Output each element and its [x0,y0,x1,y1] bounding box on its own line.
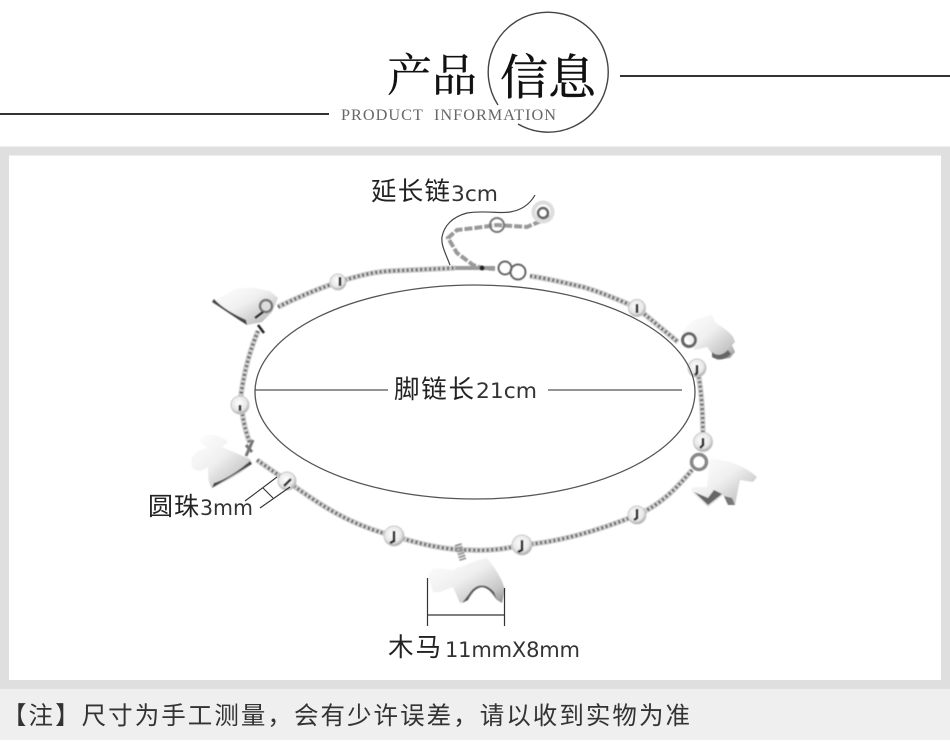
bracelet chain [241,202,703,550]
label: bead size: 3mm [200,496,253,520]
charm: right lower [692,454,757,507]
label: anklet length: 脚链长 [394,376,474,404]
label: charm size: 11mmX8mm [445,638,580,662]
subtitle: PRODUCT INFORMATION [341,107,557,124]
extension chain [448,217,550,269]
panel: product photo frame [4,151,946,684]
caption background [0,689,950,740]
heading: circled title: 信息 [500,39,597,108]
bead measure lines [245,477,290,508]
charm measure lines [428,578,504,626]
charm: top left [212,288,278,333]
charm: left [191,435,253,488]
charm: bottom [428,544,505,603]
header: product information [0,12,950,132]
label: anklet length [394,376,537,404]
caption note: 【注】尺寸为手工测量，会有少许误差，请以收到实物为准 [2,702,690,730]
label: bead size [148,493,253,521]
label: extension chain: 延长链 [371,178,450,206]
heading: chinese title: 产品 [387,39,477,104]
beads [231,274,712,555]
header circle [488,12,608,132]
oval measure: anklet inner length [255,285,695,499]
leader line: extension chain [442,195,535,265]
label: anklet length: 21cm [476,379,537,403]
label: charm size: 木马 [388,634,441,662]
label: extension chain: 3cm [451,182,498,206]
charm: right upper [682,315,735,360]
label: bead size: 圆珠 [148,493,199,521]
label: charm size [388,634,580,662]
label: extension chain [371,178,498,206]
